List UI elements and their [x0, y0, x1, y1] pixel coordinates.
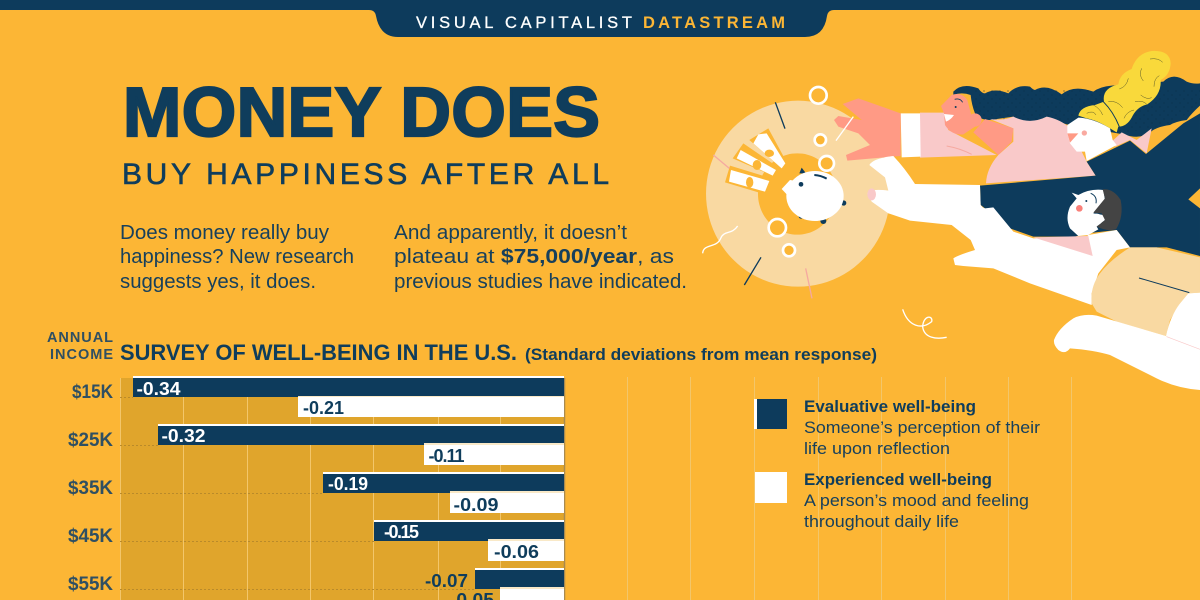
chart: survey of well-being	[47, 330, 1072, 600]
title: BUY HAPPINESS AFTER ALL	[122, 158, 609, 191]
illustration: man with arm	[947, 189, 1130, 305]
row: $25K	[68, 424, 564, 466]
row: $25K: -0.32	[162, 426, 206, 446]
intro text left: Does money really buy	[120, 222, 329, 244]
illustration: navy jacket	[980, 113, 1200, 256]
illustration: people reaching for money	[703, 51, 1200, 390]
row: $45K: -0.15	[384, 522, 419, 542]
chart heading	[120, 340, 877, 365]
illustration: donut with bills, piggy bank and coins	[703, 87, 947, 338]
row: $15K	[72, 376, 564, 418]
illustration: women's hair	[953, 77, 1200, 137]
row: $35K: -0.09	[454, 495, 498, 515]
intro text right: plateau at $75,000/year , as	[394, 246, 674, 268]
intro text right: previous studies have indicated.	[394, 271, 687, 293]
legend: evaluative well-being: life upon reflection	[804, 440, 950, 458]
intro text left: suggests yes, it does.	[120, 271, 316, 293]
legend	[754, 398, 1041, 531]
legend: experienced well-being: throughout daily life	[804, 513, 959, 531]
plot background	[120, 378, 564, 600]
legend: experienced well-being: A person’s mood and feeling	[804, 492, 1029, 510]
intro text left	[120, 222, 354, 293]
legend: evaluative well-being	[754, 398, 1041, 458]
title: MONEY DOES	[123, 73, 600, 151]
axis label: annual income	[47, 330, 113, 363]
intro text right: And apparently, it doesn’t	[394, 222, 627, 244]
row: $55K: -0.07	[425, 571, 468, 591]
row: $45K: -0.06	[494, 542, 539, 562]
row: $15K: -0.21	[303, 398, 344, 418]
legend: experienced well-being: Experienced well-being	[804, 471, 992, 489]
header banner: DATASTREAM	[643, 14, 785, 32]
row: $45K: $45K	[68, 526, 113, 547]
legend: experienced well-being	[755, 471, 1029, 531]
header banner	[0, 0, 1200, 37]
illustration: first woman's arm and hand	[834, 98, 997, 161]
row: $35K: $35K	[68, 478, 113, 499]
axis label: annual income: ANNUAL	[47, 330, 113, 346]
legend: evaluative well-being: Evaluative well-being	[804, 398, 976, 416]
row: $25K: $25K	[68, 430, 113, 451]
chart heading: (Standard deviations from mean response)	[525, 346, 877, 364]
row: $15K: $15K	[72, 382, 113, 403]
header banner: VISUAL CAPITALIST	[416, 14, 632, 32]
title	[122, 73, 609, 191]
row: $45K	[68, 520, 564, 562]
row: $55K: $55K	[68, 574, 113, 595]
illustration: blonde woman	[1067, 51, 1171, 161]
intro text left: happiness? New research	[120, 246, 354, 268]
row: $55K	[68, 568, 564, 600]
row: $25K: -0.11	[428, 446, 464, 466]
illustration: pink torso	[986, 117, 1152, 183]
illustration: first woman's head and neck	[941, 94, 1013, 155]
intro text right	[394, 222, 687, 293]
illustration: second woman's white arm and hand	[867, 156, 997, 243]
row: $35K	[68, 472, 564, 515]
legend: evaluative well-being: Someone’s perception of their	[804, 419, 1041, 437]
chart heading: SURVEY OF WELL-BEING IN THE U.S.	[120, 340, 517, 365]
illustration: shorts and legs	[1054, 247, 1200, 390]
axis label: annual income: INCOME	[50, 347, 113, 363]
row: $35K: -0.19	[328, 474, 368, 494]
row: $15K: -0.34	[136, 379, 180, 399]
